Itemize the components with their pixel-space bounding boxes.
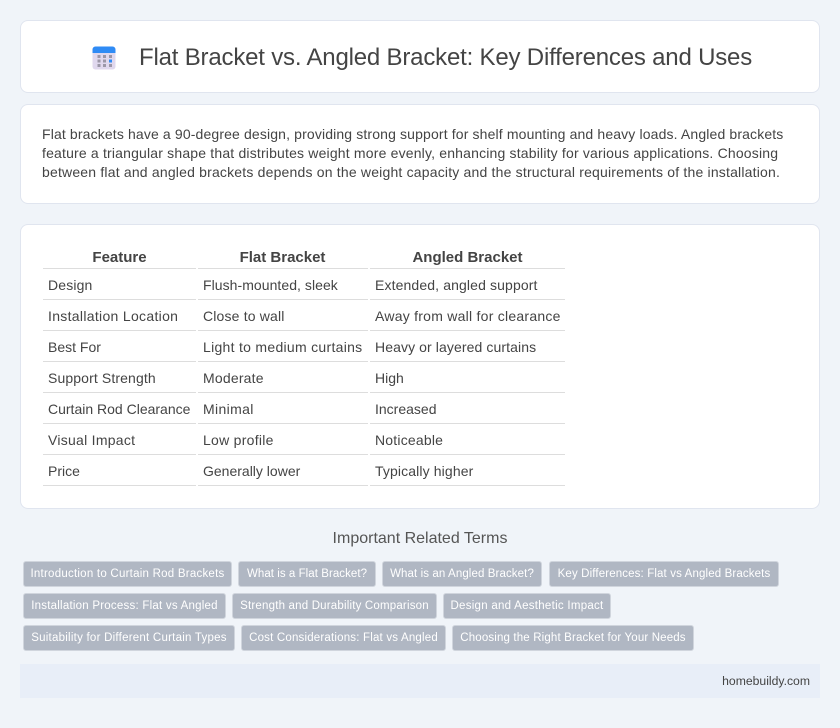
related term tags: Strength and Durability Comparison	[240, 600, 429, 612]
comparison table: Extended, angled support	[375, 277, 538, 293]
comparison table: Light to medium curtains	[203, 339, 362, 355]
comparison table: Heavy or layered curtains	[375, 339, 536, 355]
comparison table: Close to wall	[203, 308, 285, 324]
panel: comparison table	[20, 224, 820, 509]
comparison table	[43, 249, 565, 486]
comparison table: Minimal	[203, 401, 254, 417]
comparison table: Flush-mounted, sleek	[203, 277, 338, 293]
panel: header	[20, 20, 820, 93]
comparison table: Angled Bracket	[412, 249, 523, 266]
comparison table: Support Strength	[48, 370, 156, 386]
text block: introduction: between flat and angled brackets depends on the weight capacity and the structural requirements of the installation.	[42, 164, 780, 180]
comparison table: Noticeable	[375, 432, 443, 448]
text block: introduction: feature a triangular shape that distributes weight more evenly, enhancing stability for various applications. Choosing	[42, 145, 778, 161]
comparison table: Away from wall for clearance	[375, 308, 561, 324]
comparison table: Generally lower	[203, 463, 300, 479]
related term tags: Choosing the Right Bracket for Your Needs	[460, 632, 686, 644]
related term tags: What is a Flat Bracket?	[247, 568, 367, 580]
panel: introduction	[20, 104, 820, 204]
comparison table: Increased	[375, 401, 436, 417]
title: Flat Bracket vs. Angled Bracket: Key Differences and Uses	[139, 44, 752, 71]
comparison table: Typically higher	[375, 463, 473, 479]
related term tags: Design and Aesthetic Impact	[450, 600, 604, 612]
text block: introduction	[42, 126, 783, 180]
comparison table: Visual Impact	[48, 432, 135, 448]
footer source text: homebuildy.com	[722, 674, 810, 688]
footer	[20, 664, 820, 698]
comparison table: Low profile	[203, 432, 274, 448]
related term tags: Introduction to Curtain Rod Brackets	[30, 568, 224, 580]
comparison table: Installation Location	[48, 308, 178, 324]
icon: calendar	[92, 46, 116, 70]
comparison table: Best For	[48, 339, 101, 355]
heading: related terms: Important Related Terms	[333, 530, 507, 547]
related term tags: What is an Angled Bracket?	[390, 568, 534, 580]
comparison table: Design	[48, 277, 92, 293]
text block: introduction: Flat brackets have a 90-degree design, providing strong support for shelf mounting and heavy loads. Angled brackets	[42, 126, 783, 142]
related term tags	[23, 561, 779, 651]
comparison table: Moderate	[203, 370, 264, 386]
comparison table: Feature	[92, 249, 147, 266]
related term tags: Suitability for Different Curtain Types	[31, 632, 227, 644]
related term tags: Cost Considerations: Flat vs Angled	[249, 632, 438, 644]
comparison table: Curtain Rod Clearance	[48, 401, 190, 417]
related term tags: Key Differences: Flat vs Angled Brackets	[558, 568, 770, 580]
related term tags: Installation Process: Flat vs Angled	[31, 600, 218, 612]
comparison table: Price	[48, 463, 80, 479]
comparison table: Flat Bracket	[240, 249, 325, 266]
comparison table: High	[375, 370, 404, 386]
